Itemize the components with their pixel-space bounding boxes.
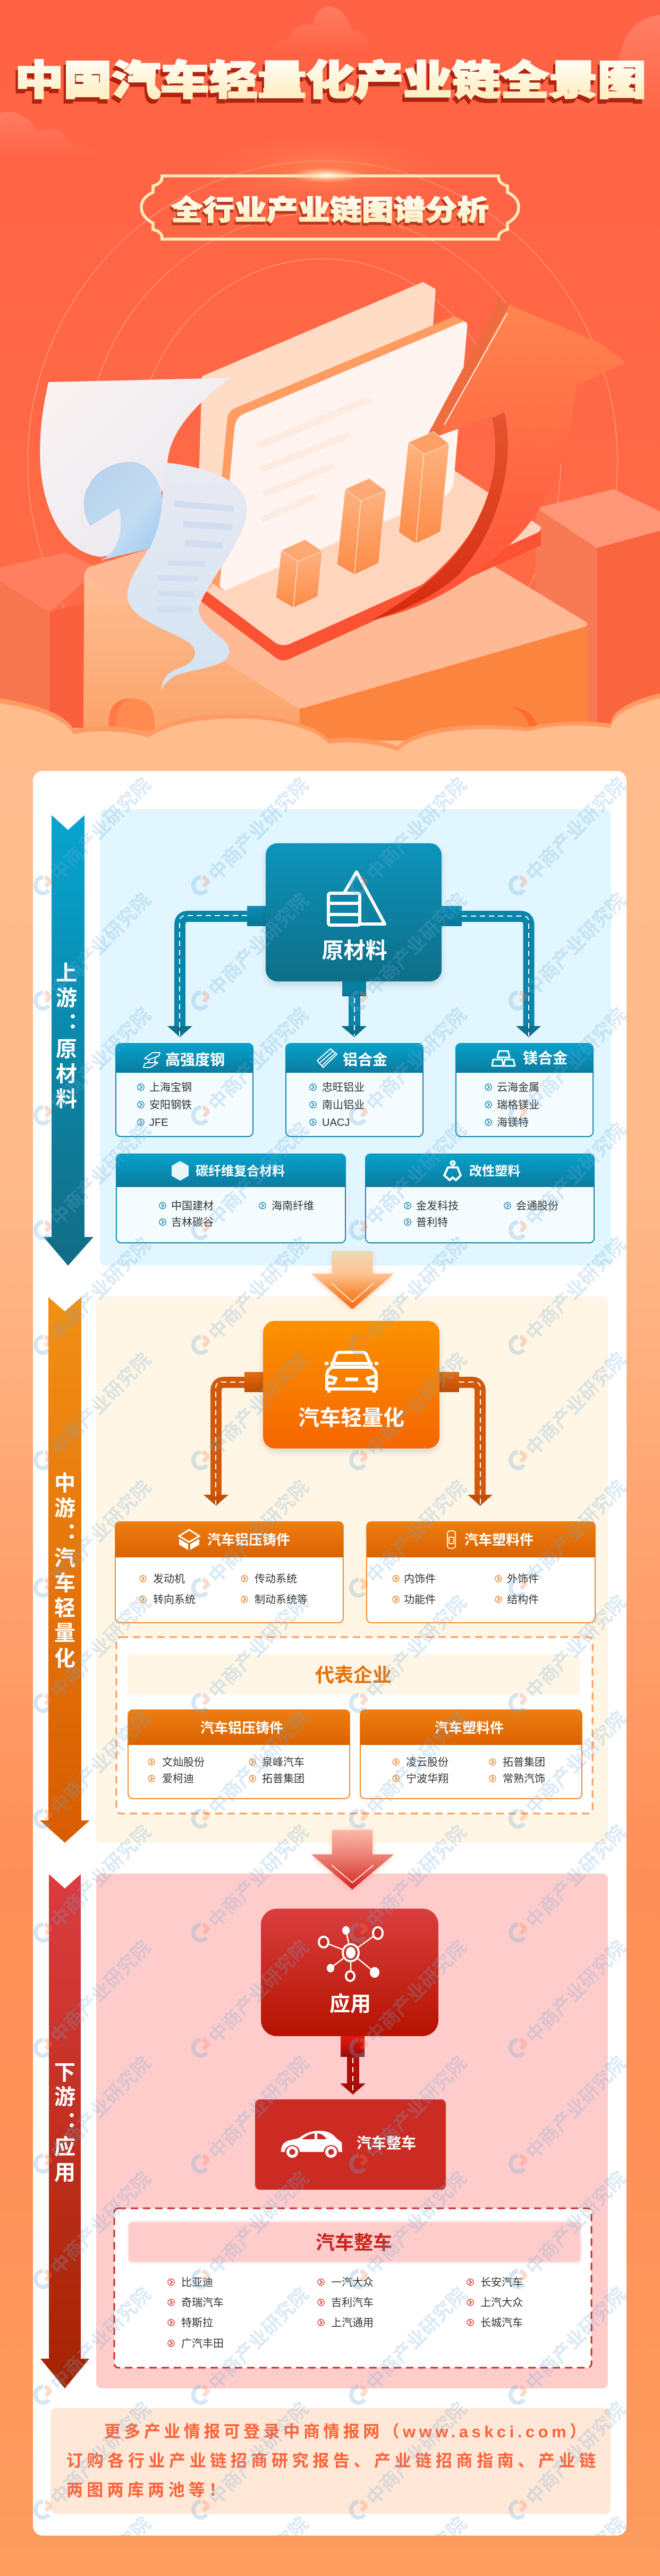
midstream band arrow: 汽 (54, 1547, 75, 1570)
watermark layer: 中商产业研究院 (204, 1004, 313, 1115)
paper scroll (40, 378, 247, 692)
watermark layer: 中商产业研究院 (46, 1349, 155, 1460)
watermark layer: 中商产业研究院 (204, 1118, 313, 1230)
list: vehicle makers: 长城汽车 (480, 2317, 523, 2329)
curved arrow (370, 301, 626, 620)
watermark layer: 中商产业研究院 (521, 2283, 630, 2395)
upstream band arrow (44, 815, 94, 1266)
list: UACJ (322, 1117, 350, 1129)
downstream band arrow: 下 (54, 2061, 75, 2084)
watermark layer: 中商产业研究院 (362, 1349, 471, 1460)
midstream band arrow: 车 (54, 1572, 75, 1595)
midstream band arrow: 轻 (54, 1597, 75, 1620)
node: raw materials (266, 843, 442, 981)
card: modified plastics (366, 1154, 594, 1243)
watermark layer: 中商产业研究院 (46, 774, 155, 885)
sub-card: die casting companies: 爱柯迪 (162, 1773, 194, 1785)
list: vehicle makers: 长安汽车 (480, 2276, 523, 2289)
watermark layer: 中商产业研究院 (204, 1936, 313, 2048)
card: aluminium die castings (115, 1522, 343, 1623)
subtitle banner (141, 130, 519, 239)
watermark layer: 中商产业研究院 (46, 1936, 155, 2048)
node: automotive lightweighting (263, 1321, 439, 1448)
downstream band arrow (40, 1874, 89, 2388)
list: 上海宝钢 (149, 1081, 192, 1094)
watermark layer: 中商产业研究院 (521, 2398, 630, 2510)
list: vehicle makers: 上汽通用 (331, 2317, 374, 2329)
watermark layer: 中商产业研究院 (362, 1476, 471, 1588)
footer note: 更多产业情报可登录中商情报网（www.askci.com） (104, 2422, 586, 2441)
watermark layer: 中商产业研究院 (362, 2283, 471, 2395)
list: 吉林碳谷 (171, 1216, 214, 1228)
list: 外饰件 (507, 1573, 539, 1585)
watermark layer: 中商产业研究院 (362, 1118, 471, 1230)
list (140, 1573, 308, 1606)
watermark layer: 中商产业研究院 (204, 2052, 313, 2164)
watermark layer: 中商产业研究院 (46, 2052, 155, 2164)
foreground cloud (0, 693, 660, 776)
card: aluminium die castings: 汽车铝压铸件 (207, 1532, 290, 1548)
icon: aluminium bars (317, 1049, 337, 1067)
transition arrow: upstream to midstream (311, 1251, 394, 1309)
list (159, 1200, 314, 1228)
watermark layer: 中商产业研究院 (46, 1118, 155, 1230)
footer note: 两图两库两池等！ (66, 2481, 229, 2499)
midstream band arrow (40, 1297, 90, 1843)
upstream band arrow: 料 (56, 1088, 77, 1111)
watermark layer: 中商产业研究院 (46, 1591, 155, 1703)
watermark layer: 中商产业研究院 (362, 1707, 471, 1819)
watermark layer: 中商产业研究院 (204, 2398, 313, 2510)
icon: materials (328, 872, 385, 925)
card: magnesium alloy (456, 1044, 593, 1137)
watermark layer: 中商产业研究院 (204, 2283, 313, 2395)
watermark layer: 中商产业研究院 (362, 774, 471, 885)
list: 忠旺铝业 (322, 1081, 365, 1094)
watermark layer: 中商产业研究院 (46, 1476, 155, 1588)
label: 汽车整车 (357, 2135, 416, 2151)
hero illustration (0, 282, 660, 776)
left back box (0, 553, 101, 727)
watermark layer: 中商产业研究院 (521, 1591, 630, 1703)
footer note (50, 2408, 611, 2514)
watermark layer: 中商产业研究院 (46, 1233, 155, 1345)
card: magnesium alloy: 镁合金 (523, 1050, 568, 1066)
list: 制动系统等 (255, 1594, 308, 1606)
downstream band arrow: 游 (54, 2086, 75, 2109)
white content panel (33, 771, 627, 2536)
watermark layer: 中商产业研究院 (521, 1476, 630, 1588)
sub-card: die casting companies (128, 1710, 350, 1799)
card: carbon fiber composite: 碳纤维复合材料 (196, 1164, 285, 1179)
upstream band arrow: 上 (56, 962, 77, 985)
footer note: 订购各行业产业链招商研究报告、产业链招商指南、产业链 (66, 2452, 596, 2470)
list (393, 1573, 539, 1606)
downstream band arrow: ： (66, 2108, 88, 2132)
watermark layer: 中商产业研究院 (46, 1004, 155, 1115)
list (310, 1081, 365, 1129)
label: 应用 (329, 1993, 371, 2016)
list: 发动机 (153, 1573, 185, 1585)
watermark layer: 中商产业研究院 (362, 1233, 471, 1345)
watermark layer: 中商产业研究院 (362, 889, 471, 1001)
midstream band arrow: 游 (54, 1497, 75, 1520)
card: carbon fiber composite (116, 1154, 345, 1243)
upstream band arrow: 原 (56, 1038, 77, 1061)
heading strip (128, 1654, 580, 1694)
watermark layer: 中商产业研究院 (362, 1821, 471, 1933)
list (485, 1081, 539, 1129)
watermark layer: 中商产业研究院 (204, 1476, 313, 1588)
watermark layer: 中商产业研究院 (521, 1233, 630, 1345)
watermark layer: 中商产业研究院 (46, 2398, 155, 2510)
cloud: top centre (273, 6, 370, 50)
icon: engine block (179, 1530, 199, 1550)
icon: steel beam (143, 1053, 160, 1067)
icon: ingots (492, 1051, 515, 1066)
watermark layer: 中商产业研究院 (521, 1118, 630, 1230)
icon: car top view (447, 1531, 455, 1548)
downstream band arrow: 应 (54, 2136, 75, 2159)
list: 结构件 (507, 1594, 539, 1606)
watermark layer: 中商产业研究院 (521, 1349, 630, 1460)
list: vehicle makers: 奇瑞汽车 (181, 2297, 224, 2309)
list: 传动系统 (255, 1573, 297, 1585)
list: 海南纤维 (272, 1200, 314, 1212)
list: 功能件 (404, 1594, 436, 1606)
list: 转向系统 (153, 1594, 196, 1606)
dashed box: representative companies (116, 1637, 593, 1814)
sub-card: die casting companies: 泉峰汽车 (262, 1756, 304, 1768)
icon: plastics (444, 1162, 461, 1180)
sub-card: die casting companies: 拓普集团 (262, 1773, 304, 1785)
front document (211, 316, 467, 590)
watermark layer: 中商产业研究院 (521, 1707, 630, 1819)
sub-card: plastic parts companies: 常熟汽饰 (503, 1773, 545, 1785)
dashed box: vehicle makers (114, 2208, 591, 2368)
subtitle banner: 全行业产业链图谱分析 (171, 196, 489, 226)
watermark layer: 中商产业研究院 (521, 1821, 630, 1933)
card: high strength steel: 高强度钢 (165, 1052, 225, 1068)
watermark layer: 中商产业研究院 (204, 1707, 313, 1819)
list: vehicle makers: 上汽大众 (480, 2297, 523, 2309)
card: plastic parts (367, 1522, 595, 1623)
watermark layer: 中商产业研究院 (46, 2283, 155, 2395)
watermark layer: 中商产业研究院 (362, 2167, 471, 2279)
list: 内饰件 (404, 1573, 436, 1585)
list: 瑞格镁业 (497, 1099, 539, 1111)
midstream band arrow: 化 (54, 1647, 75, 1671)
label: 汽车轻量化 (298, 1406, 404, 1430)
list: JFE (149, 1117, 168, 1129)
node: complete vehicles (255, 2099, 446, 2190)
list: vehicle makers: 特斯拉 (181, 2317, 213, 2329)
icon: car front (325, 1352, 378, 1393)
subtitle banner: 全行业产业链图谱分析 (170, 198, 488, 229)
list: vehicle makers: 一汽大众 (331, 2276, 374, 2289)
sub-card: plastic parts companies: 拓普集团 (503, 1756, 545, 1768)
watermark layer: 中商产业研究院 (362, 2398, 471, 2510)
list: 海镁特 (497, 1116, 529, 1129)
sub-card: plastic parts companies: 凌云股份 (406, 1756, 449, 1768)
watermark layer: 中商产业研究院 (46, 1821, 155, 1933)
watermark layer: 中商产业研究院 (204, 889, 313, 1001)
watermark layer: 中商产业研究院 (362, 2052, 471, 2164)
watermark layer: 中商产业研究院 (46, 1707, 155, 1819)
watermark layer: 中商产业研究院 (362, 1004, 471, 1115)
watermark layer: 中商产业研究院 (204, 1821, 313, 1933)
transition arrow: midstream to downstream (311, 1830, 394, 1889)
upstream band arrow: ： (67, 1010, 89, 1033)
list: vehicle makers: 广汽丰田 (181, 2337, 224, 2350)
sub-card: plastic parts companies: 宁波华翔 (406, 1773, 449, 1785)
watermark layer: 中商产业研究院 (204, 1349, 313, 1460)
background concentric arcs (28, 161, 617, 764)
midstream band arrow: 中 (54, 1472, 75, 1495)
watermark layer: 中商产业研究院 (362, 1591, 471, 1703)
node: application (261, 1909, 438, 2036)
watermark layer: 中商产业研究院 (46, 889, 155, 1001)
card: modified plastics: 改性塑料 (469, 1164, 520, 1179)
downstream band arrow: 用 (54, 2161, 75, 2184)
connector pipes: lightweighting (204, 1372, 493, 1506)
cloud: left (0, 112, 101, 156)
watermark layer: 中商产业研究院 (521, 774, 630, 885)
title: 中国汽车轻量化产业链全景图 (13, 63, 644, 108)
list: 金发科技 (416, 1200, 459, 1212)
list: 中国建材 (171, 1200, 214, 1212)
watermark layer: 中商产业研究院 (46, 2167, 155, 2279)
list: vehicle makers (168, 2276, 523, 2350)
list (404, 1200, 559, 1228)
upper platform (198, 471, 541, 660)
watermark layer: 中商产业研究院 (204, 1233, 313, 1345)
list (138, 1081, 192, 1129)
icon: car side (281, 2131, 342, 2159)
main platform box (83, 548, 588, 741)
list: 会通股份 (516, 1200, 559, 1212)
connector: application to vehicles (340, 2036, 366, 2095)
label: 原材料 (322, 938, 387, 963)
card: aluminium alloy (286, 1044, 423, 1137)
card: high strength steel (116, 1044, 253, 1137)
sub-card: die casting companies: 汽车铝压铸件 (200, 1720, 283, 1736)
list: 南山铝业 (322, 1099, 365, 1111)
list: 普利特 (416, 1216, 448, 1228)
title: 中国汽车轻量化产业链全景图 (15, 58, 646, 104)
card: plastic parts: 汽车塑料件 (464, 1532, 534, 1548)
cloud: right (518, 15, 660, 120)
watermark layer: 中商产业研究院 (204, 774, 313, 885)
sub-card: plastic parts companies: 汽车塑料件 (435, 1720, 504, 1736)
back document (196, 282, 456, 590)
watermark layer: 中商产业研究院 (521, 1004, 630, 1115)
list: vehicle makers: 比亚迪 (181, 2276, 213, 2289)
midstream section panel (96, 1297, 608, 1843)
3D bars (276, 431, 449, 608)
connector pipes: raw materials (167, 906, 541, 1037)
list: 云海金属 (497, 1081, 539, 1094)
watermark layer: 中商产业研究院 (521, 2167, 630, 2279)
card: aluminium alloy: 铝合金 (343, 1052, 387, 1068)
list: vehicle makers: 吉利汽车 (331, 2297, 374, 2309)
heading: 汽车整车 (316, 2232, 392, 2253)
midstream band arrow: 量 (54, 1622, 75, 1645)
icon: network (319, 1926, 383, 1981)
watermark layer: 中商产业研究院 (362, 1936, 471, 2048)
watermark layer: 中商产业研究院 (521, 2052, 630, 2164)
upstream band arrow: 游 (56, 987, 77, 1010)
sub-card: plastic parts companies (360, 1710, 582, 1799)
upstream section panel (100, 809, 611, 1266)
upstream band arrow: 材 (56, 1063, 77, 1086)
downstream section panel (96, 1874, 608, 2388)
list: 安阳钢铁 (149, 1099, 192, 1111)
watermark layer: 中商产业研究院 (521, 1936, 630, 2048)
right back box (532, 489, 660, 727)
heading: 代表企业 (315, 1664, 392, 1686)
watermark layer: 中商产业研究院 (204, 2167, 313, 2279)
sub-card: die casting companies: 文灿股份 (162, 1756, 205, 1768)
icon: carbon hatch (172, 1161, 189, 1181)
heading strip (128, 2222, 581, 2263)
watermark layer (36, 774, 630, 2576)
midstream band arrow: ： (66, 1520, 88, 1543)
watermark layer: 中商产业研究院 (521, 889, 630, 1001)
watermark layer: 中商产业研究院 (204, 1591, 313, 1703)
